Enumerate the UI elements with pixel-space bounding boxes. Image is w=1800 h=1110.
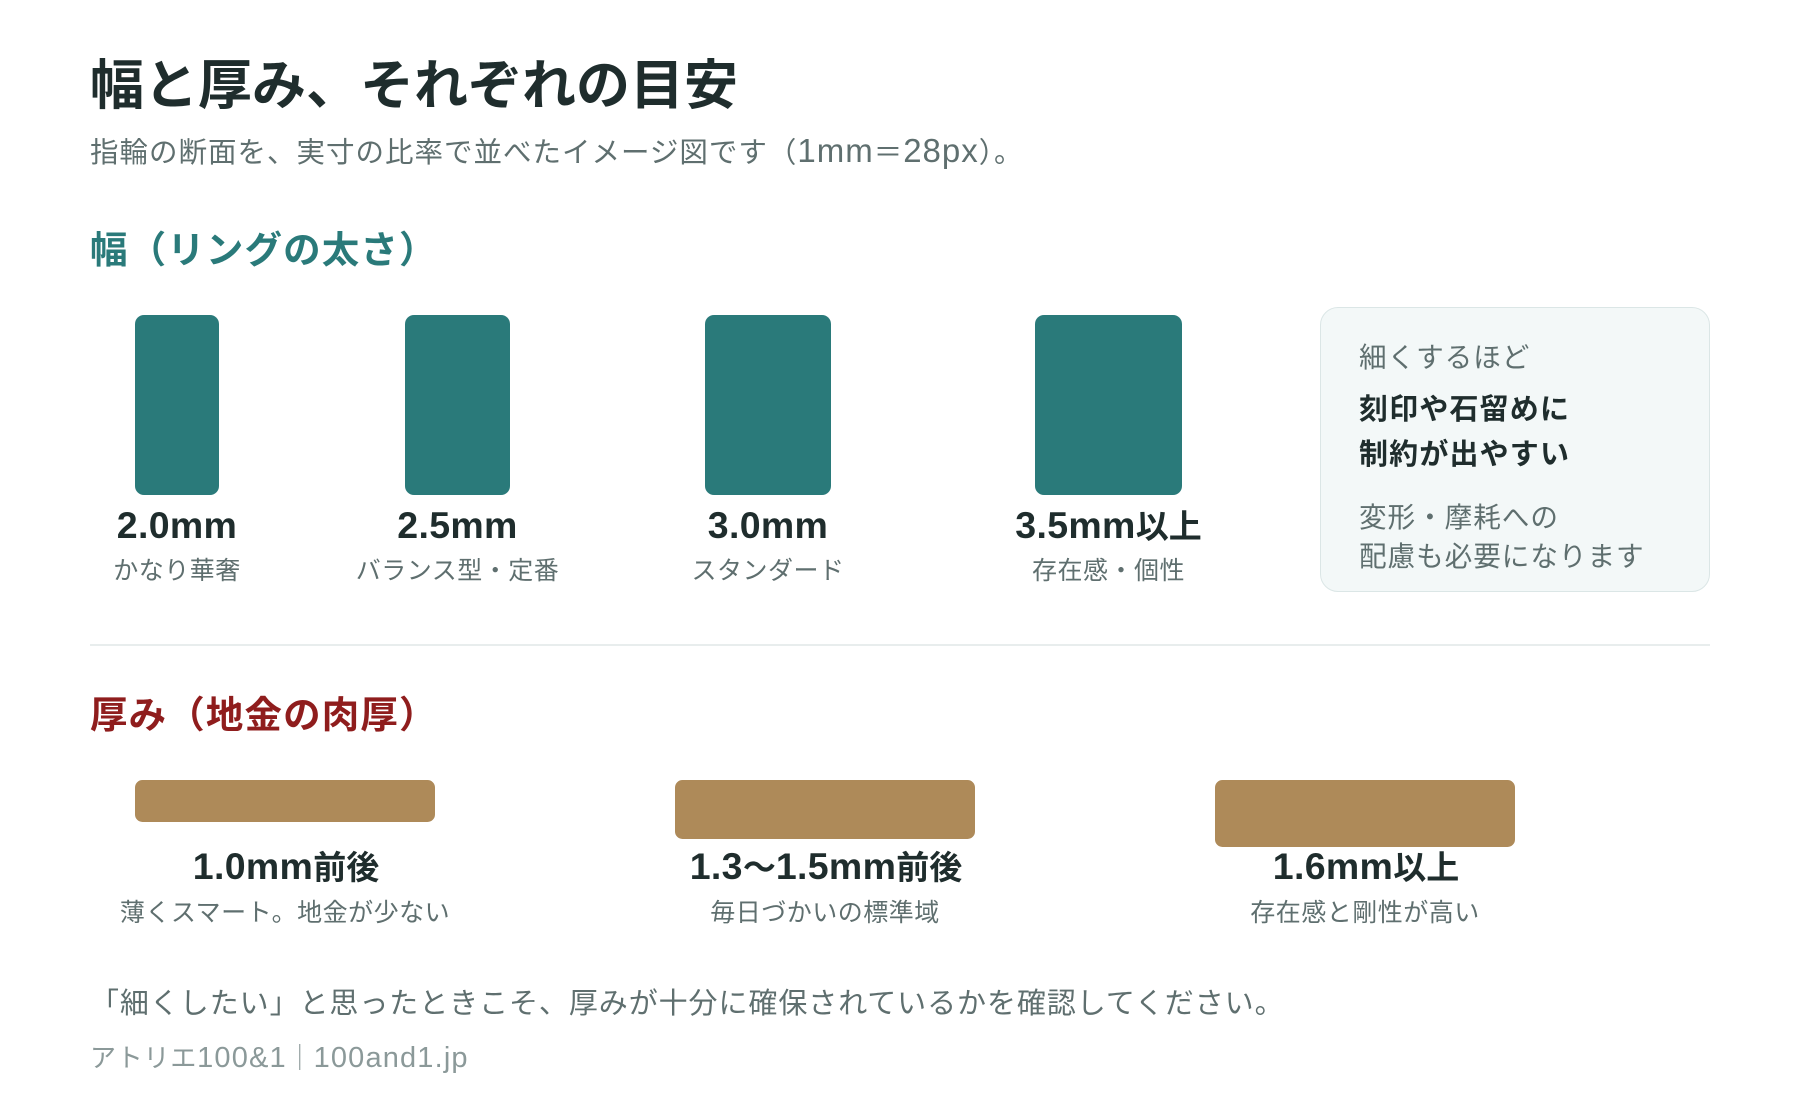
bar: 1.6mm [1215,780,1515,847]
width item: 3.5mm以上 [1015,307,1700,592]
callout note: 変形・摩耗への [1359,502,1559,533]
caption: 1.6mm: 存在感と剛性が高い [1250,899,1480,927]
caption: 3.5mm以上: 存在感・個性 [1032,557,1185,585]
value: 1.0mm: 1.0mm前後 [193,845,379,887]
thickness item: 1.3-1.5mm [675,780,975,927]
callout emphasis [1359,394,1570,471]
section heading: thickness: 厚み（地金の肉厚） [90,694,438,736]
caption: 1.0mm: 薄くスマート。地金が少ない [120,899,450,927]
thickness item: 1.0mm [120,780,450,927]
callout emphasis: 制約が出やすい [1359,439,1570,471]
divider [90,644,1710,646]
callout panel [1320,307,1710,592]
width item: 3.0mm [691,307,1700,592]
value: 3.5mm以上: 3.5mm以上 [1015,504,1202,546]
value: 3.0mm: 3.0mm [708,504,828,546]
value: 2.0mm: 2.0mm [117,504,237,546]
bar: 1.3-1.5mm [675,780,975,839]
caption: 2.5mm: バランス型・定番 [356,557,559,585]
section heading: width: 幅（リングの太さ） [90,229,438,271]
width item: 2.5mm [356,307,1700,592]
caption: 1.3-1.5mm: 毎日づかいの標準域 [710,899,940,927]
footer credit: アトリエ100&1｜100and1.jp [90,1042,469,1074]
callout note [1359,502,1645,572]
title: 幅と厚み、それぞれの目安 [90,56,738,116]
bar: 3.0mm [705,315,831,495]
bar: 2.5mm [405,315,510,495]
value: 2.5mm: 2.5mm [397,504,518,546]
closing note: 「細くしたい」と思ったときこそ、厚みが十分に確保されているかを確認してください。 [90,988,1285,1020]
caption: 3.0mm: スタンダード [691,557,844,585]
width item: 2.0mm [113,315,241,585]
bar: 1.0mm [135,780,435,822]
callout note: 配慮も必要になります [1359,541,1645,572]
subtitle: 指輪の断面を、実寸の比率で並べたイメージ図です（1mm＝28px）。 [90,132,1023,169]
bar: 2.0mm [135,315,219,495]
value: 1.3-1.5mm: 1.3〜1.5mm前後 [690,845,962,887]
caption: 2.0mm: かなり華奢 [113,557,241,585]
callout intro: 細くするほど [1359,342,1530,373]
value: 1.6mm: 1.6mm以上 [1273,845,1459,887]
thickness item: 1.6mm [1215,780,1515,927]
callout emphasis: 刻印や石留めに [1359,394,1570,426]
bar: 3.5mm以上 [1035,315,1182,495]
